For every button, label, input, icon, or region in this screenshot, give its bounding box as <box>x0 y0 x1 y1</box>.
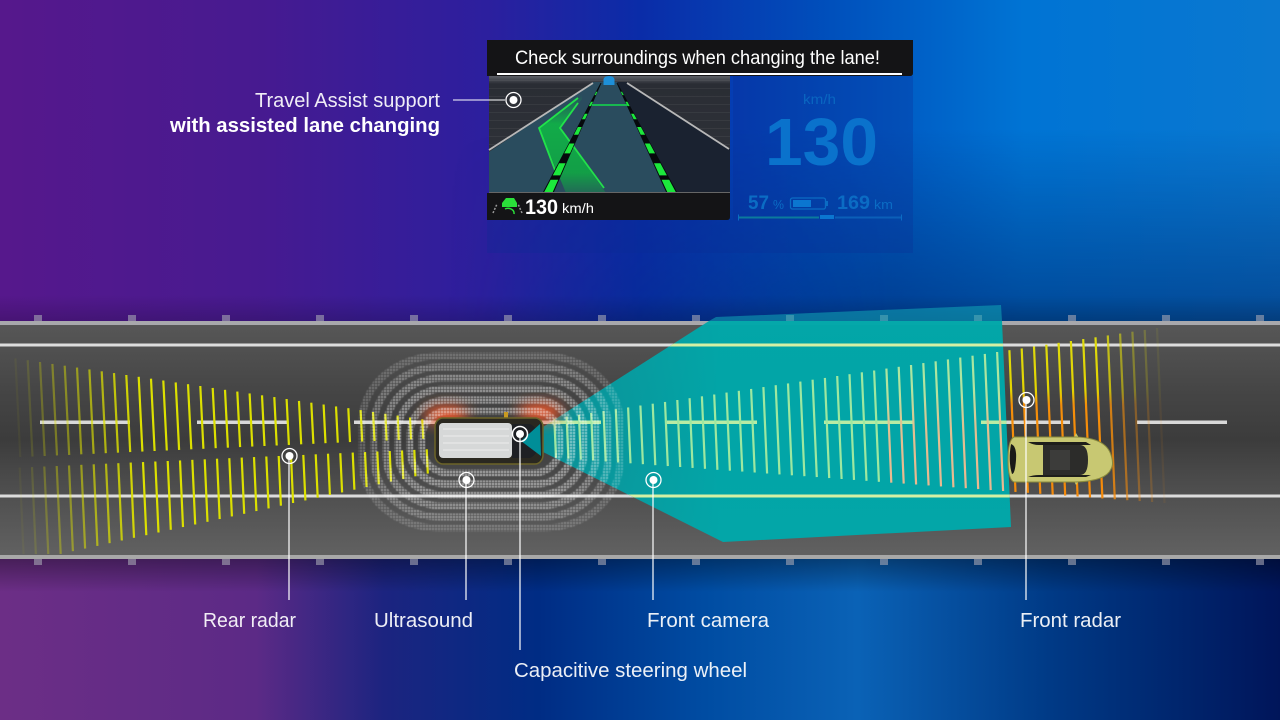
camera scan lines <box>554 370 879 482</box>
callout: ultrasound <box>374 472 474 632</box>
callout: travel assist: with assisted lane changing <box>169 115 440 137</box>
callout: travel assist <box>169 90 521 137</box>
rails <box>0 321 1280 325</box>
ultrasound field <box>362 356 620 528</box>
callout: ultrasound: Ultrasound <box>374 610 473 632</box>
front camera field of view <box>544 305 1011 542</box>
callout: capacitive steering wheel <box>512 426 747 682</box>
driver display <box>487 40 913 253</box>
lane dividers <box>542 83 678 193</box>
upper rear beam <box>15 358 423 457</box>
cluster readouts: 57 <box>748 193 769 214</box>
lead car <box>1008 433 1112 485</box>
roof <box>439 423 512 458</box>
status bar <box>487 192 730 220</box>
rear radar beams <box>15 358 428 562</box>
status bar: 130 <box>525 196 558 219</box>
side windows <box>1028 442 1091 477</box>
cluster readouts: % <box>773 197 784 212</box>
message header: Check surroundings when changing the lane! <box>515 48 880 69</box>
lane lines <box>0 344 1280 346</box>
callout: travel assist: Travel Assist support <box>255 90 440 112</box>
message header <box>487 40 913 76</box>
battery icon <box>790 198 828 209</box>
callout: rear radar <box>203 448 297 632</box>
heat glow at front and rear corners <box>424 403 562 424</box>
body <box>435 418 543 464</box>
left roadway <box>489 82 675 193</box>
road <box>0 315 1280 565</box>
mirrors <box>1074 433 1079 485</box>
lane view <box>489 76 730 193</box>
assist icon <box>493 198 522 214</box>
callout: front camera: Front camera <box>647 610 770 632</box>
cluster readouts <box>738 91 902 220</box>
asphalt <box>0 321 1280 559</box>
lead vehicle icon <box>604 76 614 85</box>
radar lines overlapping the camera field <box>886 352 1003 491</box>
green lane-change path <box>539 93 606 193</box>
callout: rear radar: Rear radar <box>203 610 296 632</box>
ego car <box>435 412 543 464</box>
windscreen <box>512 424 539 458</box>
camera wedge inside the windscreen <box>521 424 541 456</box>
rear window <box>1010 444 1016 474</box>
guard rail posts <box>34 315 1264 565</box>
lane markings seen through the camera field <box>548 344 1010 498</box>
lower rear beam <box>20 449 428 562</box>
callout: front radar <box>1019 392 1121 632</box>
callout: capacitive steering wheel: Capacitive steering wheel <box>514 660 747 682</box>
glass roof <box>1043 445 1088 475</box>
mirrors <box>504 412 508 420</box>
radar lines beyond the camera field <box>1009 328 1164 503</box>
cluster readouts: 130 <box>765 105 878 180</box>
translucent cluster panel <box>487 76 913 253</box>
range bar <box>738 214 902 220</box>
callout: front radar: Front radar <box>1020 610 1121 632</box>
body <box>1008 437 1112 482</box>
centre dashes <box>40 420 1227 424</box>
road edges <box>489 83 729 150</box>
cluster readouts: km/h <box>803 91 836 107</box>
cluster readouts: km <box>874 197 893 212</box>
right roadway <box>617 82 730 193</box>
sky <box>489 76 730 156</box>
status bar: km/h <box>562 200 594 216</box>
target bar <box>592 104 627 106</box>
front radar beam <box>554 328 1164 503</box>
cluster readouts: 169 <box>837 193 870 214</box>
callout: front camera <box>646 472 770 632</box>
